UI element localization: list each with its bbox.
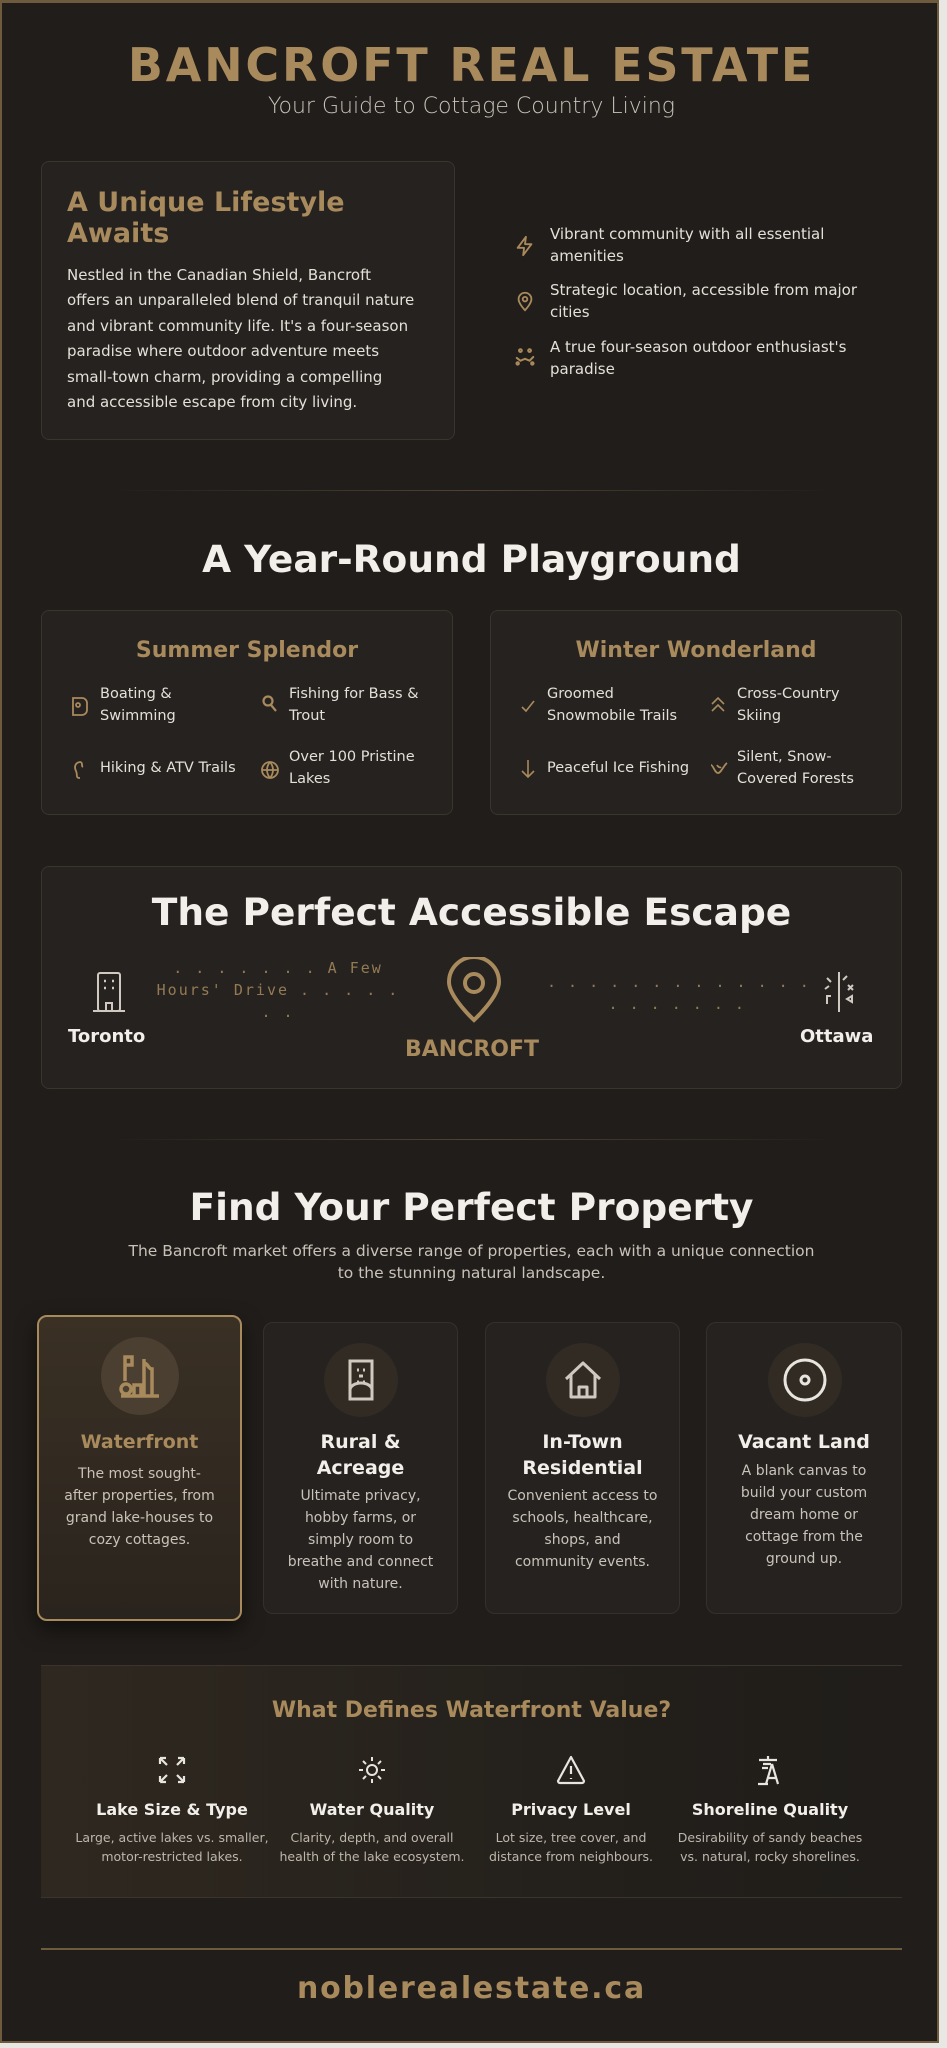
text: lifestyle body: paradise where outdoor adventure meets [67,342,379,360]
item: water quality: Water Quality [310,1800,434,1819]
icon: waterfront [101,1337,179,1415]
text: drive time [157,959,399,1021]
item: boating: Swimming [100,708,176,724]
text: bullet 2: cities [550,303,590,321]
text: lifestyle body: and accessible escape from city living. [67,393,357,411]
card: vacant land: Vacant Land [738,1431,870,1453]
card: in-town: Convenient access to [508,1488,657,1504]
item: skiing: Cross-Country [737,686,840,702]
icon: ottawa [824,972,854,1012]
icon: lightning [516,236,532,256]
dots: right route: . . . . . . . [609,995,745,1013]
text: bullet 3: A true four-season outdoor enthusiast's [550,338,846,356]
heading: lifestyle: Awaits [67,218,169,249]
heading: lifestyle [67,187,345,249]
subtitle: Your Guide to Cottage Country Living [268,94,675,119]
text: property intro: to the stunning natural landscape. [338,1264,605,1282]
item: forests: Silent, Snow- [737,749,832,765]
card: rural: simply room to [308,1532,413,1548]
list: lifestyle bullets [516,225,858,378]
item: lakes [261,749,415,787]
item: privacy [489,1756,653,1864]
item: water quality: Clarity, depth, and overall health of the lake ecosystem. [279,1830,465,1864]
item: lake size [75,1756,269,1864]
card: waterfront: after properties, from [64,1488,215,1504]
item: lakes: Lakes [289,771,330,787]
panel: winter [490,610,902,815]
dots: right route [547,973,810,1013]
text: bullet 2: Strategic location, accessible from major [550,281,857,299]
card: rural: with nature. [318,1576,403,1592]
card: waterfront: grand lake-houses to [66,1510,213,1526]
title: BANCROFT REAL ESTATE [128,38,815,92]
item: hiking: Hiking & ATV Trails [100,760,236,776]
card: vacant land: build your custom [741,1485,867,1501]
item: forests: Covered Forests [737,771,854,787]
dots: right route: . . . . . . . . . . . . . [547,973,810,991]
item: fishing [262,686,418,724]
text: bullet 1: Vibrant community with all essential [550,225,824,243]
card: rural [263,1322,458,1614]
heading: lifestyle: A Unique Lifestyle [67,187,345,218]
text: drive time: . . [261,1003,295,1021]
label: bancroft: BANCROFT [405,1037,539,1062]
item: lake size: Large, active lakes vs. smaller, motor-restricted lakes. [75,1830,269,1864]
text: bullet 3 [550,338,846,378]
text: bullet 2 [550,281,858,321]
item: shoreline: Desirability of sandy beaches vs. natural, rocky shorelines. [678,1830,862,1864]
text: lifestyle body: and vibrant community life. It's a four-season [67,317,408,335]
heading: winter: Winter Wonderland [576,638,816,663]
icon: people [516,348,534,366]
icon: house [546,1343,620,1417]
heading: waterfront value: What Defines Waterfront Value? [272,1698,671,1723]
card: vacant land: cottage from the [745,1529,863,1545]
panel: summer [41,610,453,815]
card: rural: hobby farms, or [305,1510,416,1526]
item: ice fishing: Peaceful Ice Fishing [547,760,689,776]
label: ottawa: Ottawa [800,1026,873,1047]
icon: target [768,1343,842,1417]
icon: pin [518,292,532,312]
card: rural: Rural & [320,1431,401,1453]
card: in-town: shops, and [544,1532,621,1548]
icon: bancroft pin [447,957,501,1023]
item: water quality [279,1757,465,1864]
card: vacant land: A blank canvas to [742,1463,866,1479]
card: waterfront [37,1315,242,1621]
item: privacy: Lot size, tree cover, and distance from neighbours. [489,1830,653,1864]
card: in-town: Residential [522,1457,643,1479]
text: bullet 1: amenities [550,247,624,265]
text: lifestyle body: Nestled in the Canadian Shield, Bancroft [67,266,371,284]
text: lifestyle body: small-town charm, providing a compelling [67,368,382,386]
item: skiing: Skiing [737,708,781,724]
text: property intro [128,1242,814,1282]
heading: escape: The Perfect Accessible Escape [152,890,791,934]
item: shoreline [678,1756,862,1864]
label: toronto: Toronto [68,1026,145,1047]
icon: toronto building [93,972,125,1012]
panel: accessible escape [41,866,902,1089]
card: vacant land [706,1322,902,1614]
item: skiing [712,686,840,724]
item: fishing: Trout [289,708,325,724]
item: boating [72,686,176,724]
item: shoreline: Shoreline Quality [692,1800,848,1819]
heading: find property: Find Your Perfect Property [189,1185,754,1229]
card: rural: Ultimate privacy, [300,1488,421,1504]
item: lakes: Over 100 Pristine [289,749,415,765]
card: rural: Acreage [317,1457,404,1479]
text: lifestyle body: offers an unparalleled blend of tranquil nature [67,291,414,309]
item: snowmobile: Groomed [547,686,614,702]
text: property intro: The Bancroft market offers a diverse range of properties, each with a unique connection [128,1242,814,1260]
text: drive time: Hours' Drive . . . . . [157,981,399,999]
card: vacant land: dream home or [750,1507,858,1523]
card: waterfront: Waterfront [81,1431,198,1453]
item: snowmobile [522,686,677,724]
panel: unique lifestyle [41,161,455,440]
item: lake size: Lake Size & Type [96,1800,248,1819]
item: fishing: Fishing for Bass & [289,686,418,702]
card: waterfront: The most sought- [78,1466,201,1482]
footer: website: noblerealestate.ca [297,1971,646,2006]
card: in-town [485,1322,680,1614]
card: vacant land: ground up. [766,1551,842,1567]
text: bullet 1 [550,225,824,265]
card: rural: breathe and connect [288,1554,433,1570]
heading: year-round playground: A Year-Round Playground [202,537,741,581]
panel: waterfront value [41,1665,902,1898]
text: lifestyle body [67,266,414,411]
card: waterfront: cozy cottages. [89,1532,190,1548]
item: forests [711,749,854,787]
card: in-town: In-Town [542,1431,623,1453]
card: in-town: schools, healthcare, [512,1510,653,1526]
card: in-town: community events. [515,1554,650,1570]
item: privacy: Privacy Level [511,1800,631,1819]
item: boating: Boating & [100,686,172,702]
text: bullet 3: paradise [550,360,615,378]
icon: rural [324,1343,398,1417]
text: drive time: . . . . . . . A Few [173,959,383,977]
item: snowmobile: Snowmobile Trails [547,708,677,724]
heading: summer: Summer Splendor [136,638,358,663]
